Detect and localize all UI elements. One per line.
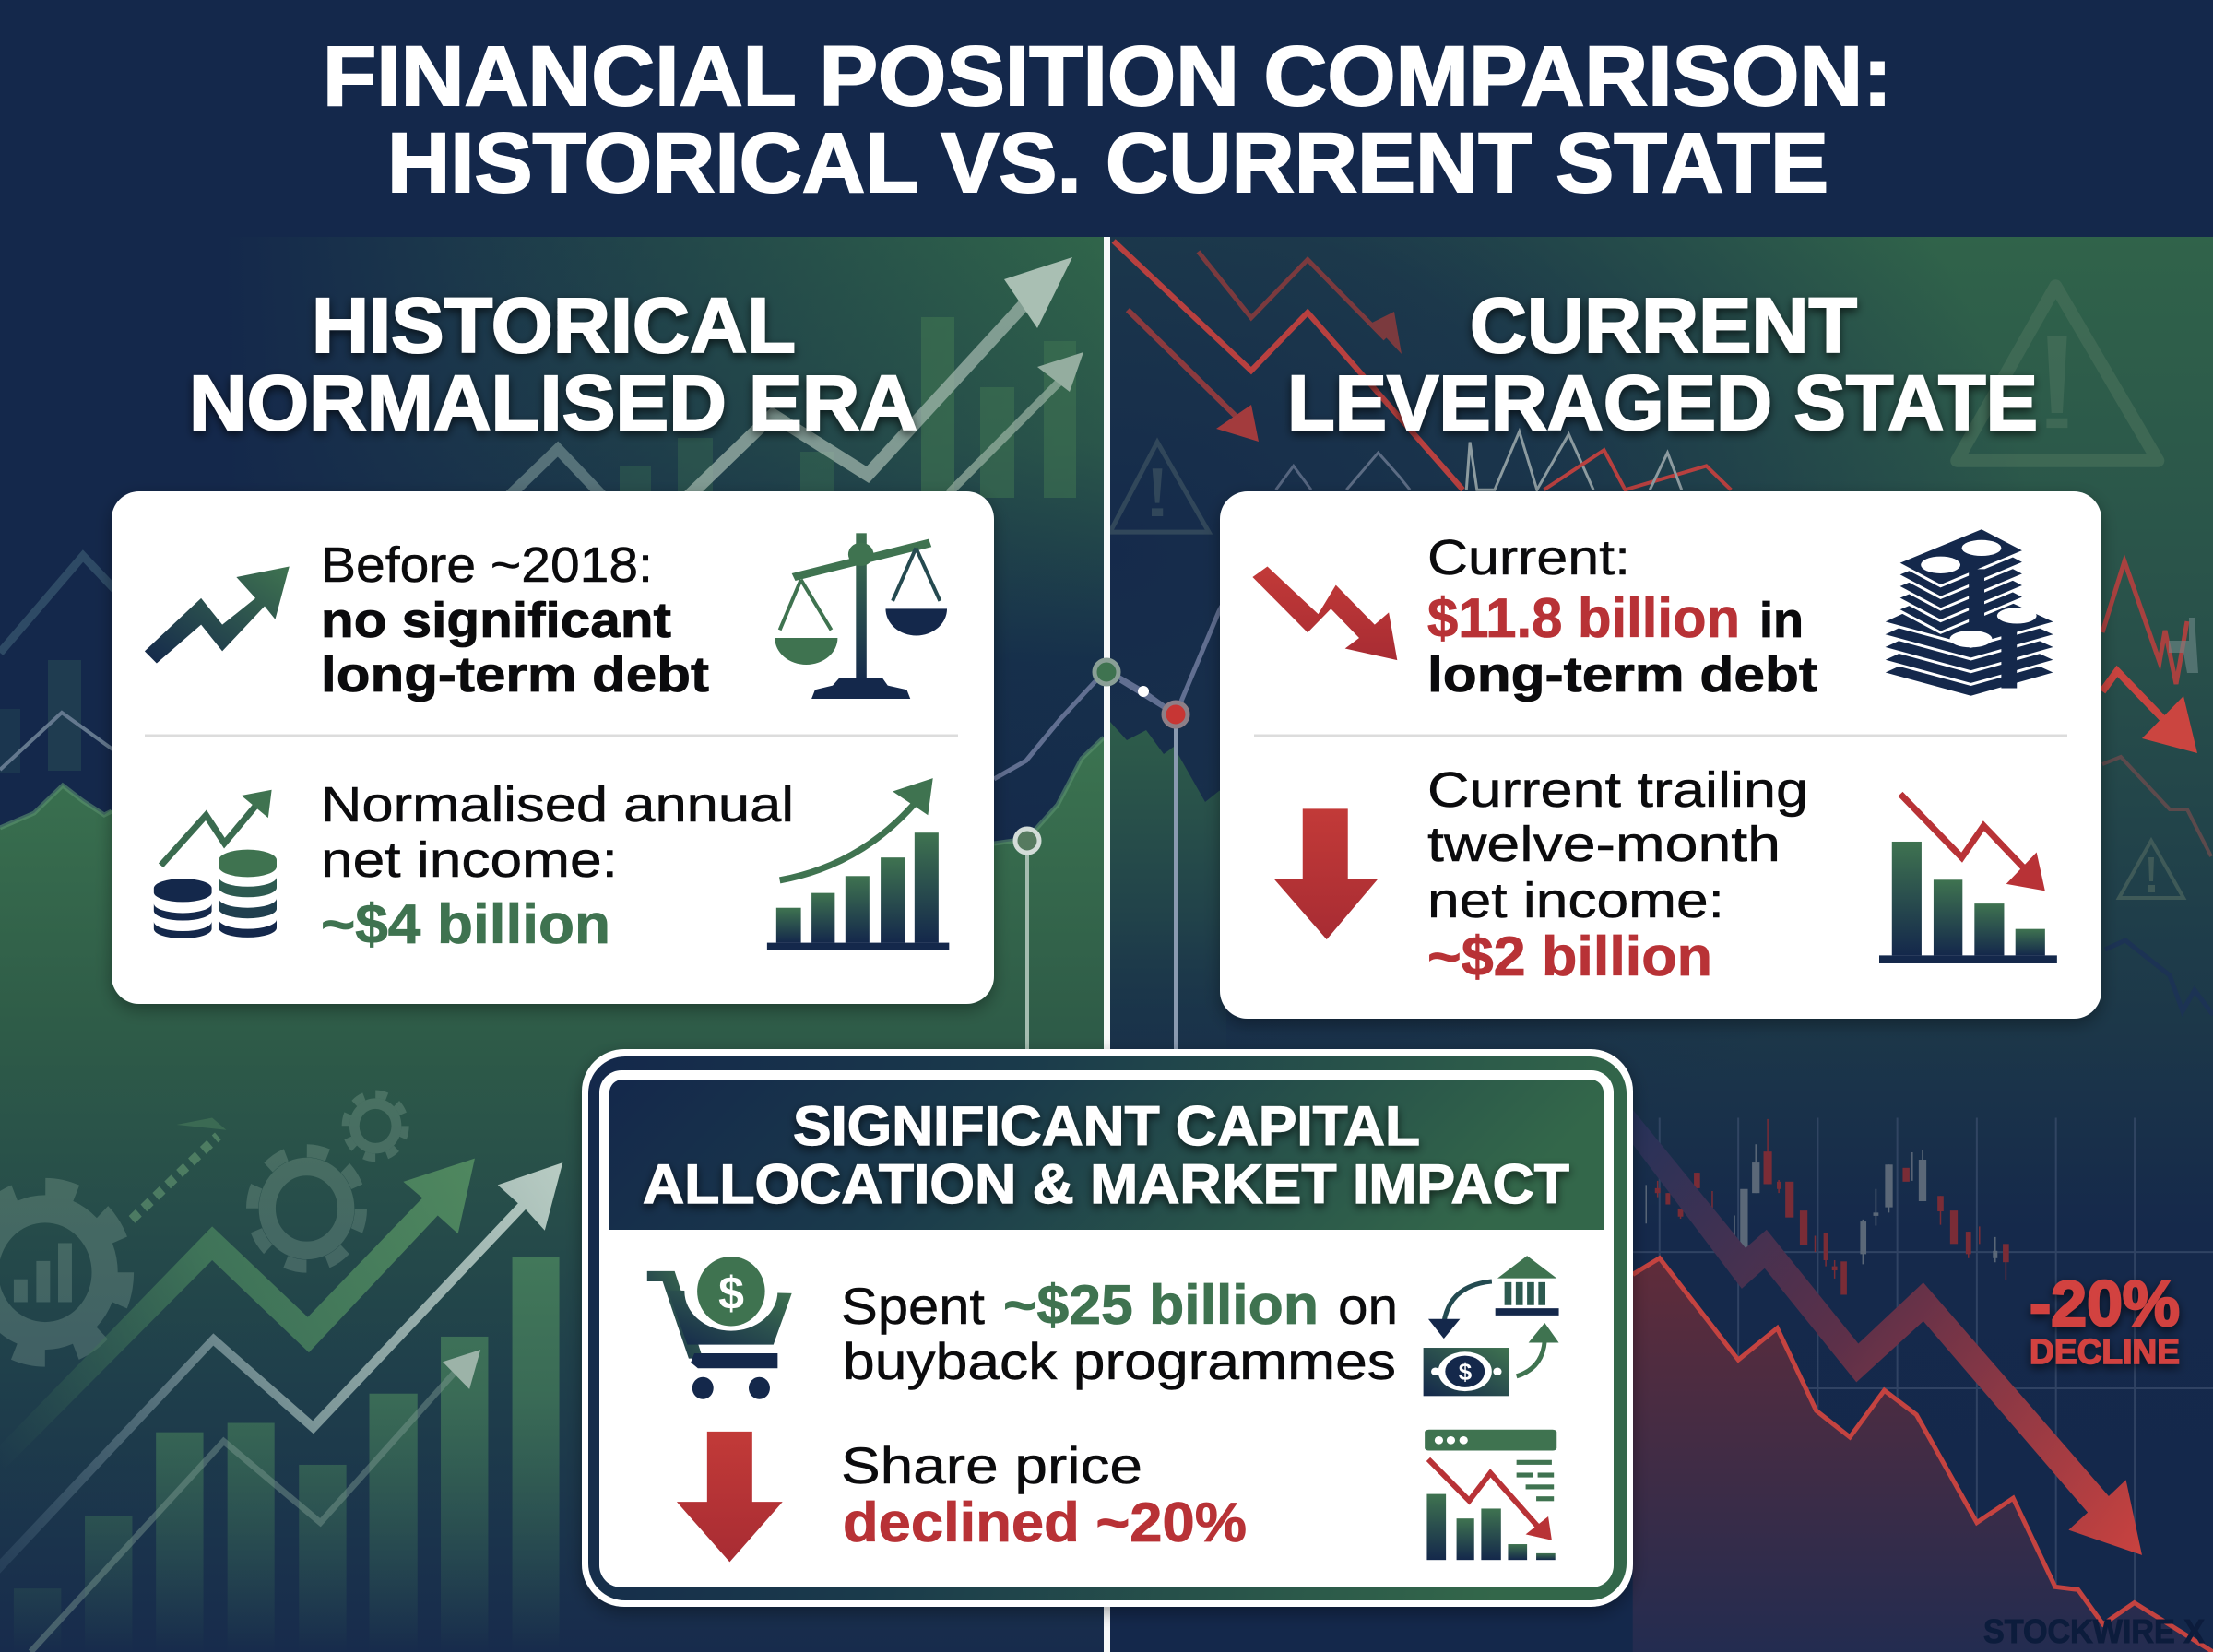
timeline connectors	[1015, 660, 1188, 1049]
icon: declining bars	[1879, 794, 2057, 963]
icon: rising zigzag arrow	[145, 566, 290, 664]
header band	[0, 0, 2213, 237]
text: normalised income: Normalised annual	[321, 777, 794, 832]
text: trailing income: Current trailing	[1427, 762, 1808, 818]
text: share price	[841, 1436, 1247, 1553]
text: long-term debt: long-term debt	[1427, 647, 1817, 702]
text: share price: declined ~20%	[843, 1492, 1247, 1553]
text: share price: Share price	[841, 1436, 1142, 1494]
heading: historical era	[189, 282, 917, 446]
panel: current background	[1110, 237, 2213, 1652]
panel: capital allocation	[582, 1049, 1633, 1607]
decline callout: -20%	[2030, 1268, 2180, 1339]
icon: balance scales	[775, 533, 947, 699]
top right rising arrows	[507, 257, 1083, 502]
text: buyback: buyback programmes	[843, 1332, 1396, 1390]
text: trailing income	[1427, 762, 1808, 987]
warning triangles	[1110, 286, 2158, 532]
text: normalised income: net income:	[321, 832, 618, 888]
heading: current state: CURRENT	[1470, 282, 1857, 369]
text: normalised income	[321, 777, 794, 955]
falling red lines	[1114, 241, 1731, 490]
text: normalised income: ~$4 billion	[321, 893, 610, 955]
text: trailing income: net income:	[1427, 873, 1724, 928]
light arrow band	[0, 1162, 562, 1574]
icon: rising bars with curve	[767, 778, 949, 950]
icon: bank and money cycle	[1424, 1256, 1559, 1396]
right edge chart lines	[2102, 561, 2187, 684]
candlesticks	[1658, 1119, 2006, 1280]
text: long-term debt: in	[1759, 593, 1804, 648]
title: FINANCIAL POSITION COMPARISON:	[323, 30, 1892, 124]
text: buyback: ~$25 billion	[1003, 1274, 1319, 1336]
text: no debt: long-term debt	[321, 647, 709, 702]
bars	[14, 1257, 560, 1652]
icon: shopping cart with coin	[647, 1252, 792, 1399]
text: long-term debt: $11.8 billion	[1427, 587, 1740, 649]
text: trailing income: ~$2 billion	[1427, 926, 1712, 987]
panel: lower right falling chart	[1633, 1110, 2213, 1652]
icon: bank and money cycle: $	[1459, 1358, 1473, 1386]
icon: red down arrow	[677, 1432, 783, 1562]
decline callout: DECLINE	[2030, 1333, 2180, 1372]
heading: current state	[1287, 282, 2038, 446]
watermark: STOCKWIRE X	[1983, 1612, 2205, 1650]
centre divider	[1104, 237, 1110, 1652]
red area chart	[1633, 1258, 2213, 1652]
text: no debt	[321, 537, 709, 702]
panel: historical card	[112, 491, 994, 1004]
icon: money stacks	[1881, 528, 2057, 697]
panel: current card	[1220, 491, 2101, 1019]
icon: coins with arrow	[154, 790, 277, 938]
heading: capital allocation: ALLOCATION & MARKET IMPACT	[643, 1153, 1569, 1215]
title	[323, 30, 1892, 210]
icon: shopping cart with coin: $	[718, 1268, 744, 1319]
heading: capital allocation: SIGNIFICANT CAPITAL	[793, 1095, 1420, 1157]
text: trailing income: twelve-month	[1427, 817, 1781, 872]
text: no debt: no significant	[321, 593, 671, 648]
panel: historical background	[0, 237, 1106, 1652]
thin arrow	[30, 1372, 455, 1652]
text: buyback	[841, 1274, 1398, 1390]
panel: lower left growth chart	[0, 1094, 562, 1652]
big falling arrow	[1633, 1110, 2142, 1555]
heading: capital allocation	[643, 1095, 1569, 1215]
panel header	[609, 1080, 1604, 1230]
green arrow band	[0, 1159, 475, 1474]
heading: current state: LEVERAGED STATE	[1287, 360, 2038, 446]
text: long-term debt: Current:	[1427, 530, 1630, 585]
decline callout	[2030, 1268, 2180, 1372]
dashed arrow	[132, 1136, 218, 1220]
text: buyback: Spent	[841, 1277, 985, 1335]
heading: historical era: HISTORICAL	[312, 282, 796, 369]
text: long-term debt	[1427, 530, 1817, 702]
title: HISTORICAL VS. CURRENT STATE	[387, 116, 1828, 210]
icon: red down arrow	[1273, 808, 1379, 939]
text: no debt: Before ~2018:	[321, 537, 653, 593]
heading: historical era: NORMALISED ERA	[189, 360, 917, 446]
icon: falling dashboard chart	[1425, 1430, 1556, 1560]
icon: falling zigzag arrow	[1252, 566, 1397, 660]
text: buyback: on	[1338, 1277, 1398, 1335]
top right rising bars	[620, 317, 1076, 502]
gears	[0, 1094, 405, 1358]
chart grid	[1633, 1118, 2213, 1652]
